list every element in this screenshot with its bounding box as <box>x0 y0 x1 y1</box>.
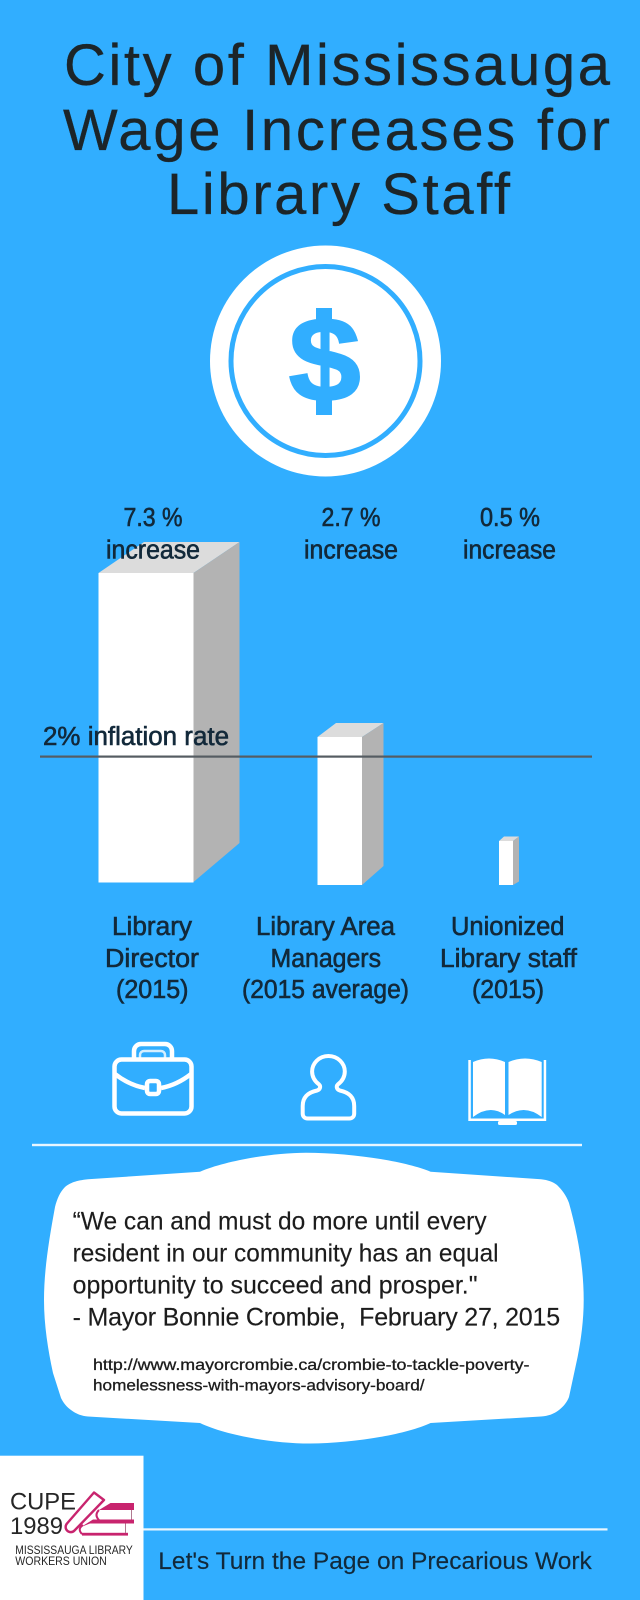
logo wordmark: 1989 <box>10 1513 63 1540</box>
bar: Unionized Library staff <box>499 836 519 885</box>
label: Library Director (2015) <box>105 913 200 1004</box>
label: Unionized Library staff (2015): Unionized <box>451 913 564 941</box>
label: Library Director (2015): Director <box>105 945 200 973</box>
label: Library Area Managers (2015 average): Managers <box>270 945 381 973</box>
source link <box>93 1357 530 1395</box>
label: 2.7 % increase: 2.7 % <box>322 504 380 532</box>
divider <box>32 1144 582 1146</box>
logo wordmark: CUPE <box>10 1488 76 1516</box>
logo: books icon <box>66 1492 134 1536</box>
label: 2.7 % increase: increase <box>304 536 398 564</box>
quote text: - Mayor Bonnie Crombie, February 27, 2015 <box>73 1303 560 1331</box>
label: inflation rate: 2% inflation rate <box>43 723 229 751</box>
label: Library Director (2015): Library <box>112 913 192 941</box>
title: Wage Increases for <box>63 98 610 163</box>
source link: http://www.mayorcrombie.ca/crombie-to-tackle-poverty- <box>93 1357 530 1374</box>
bar: Library Director <box>98 542 240 882</box>
logo wordmark <box>10 1488 133 1568</box>
source link: homelessness-with-mayors-advisory-board/ <box>93 1378 425 1395</box>
logo wordmark: WORKERS UNION <box>15 1556 107 1568</box>
icon: dollar coin: $ <box>289 293 361 427</box>
icon: person <box>303 1056 354 1118</box>
label: Library Director (2015): (2015) <box>116 976 188 1004</box>
inflation line <box>40 756 592 758</box>
label: Unionized Library staff (2015) <box>440 913 578 1004</box>
bar: Library Area Managers <box>318 723 384 885</box>
label: Unionized Library staff (2015): Library staff <box>440 945 578 973</box>
label: 7.3 % increase: increase <box>106 536 200 564</box>
quote text: “We can and must do more until every <box>73 1207 487 1235</box>
title <box>63 33 611 227</box>
label: 7.3 % increase: 7.3 % <box>124 504 182 532</box>
quote panel <box>44 1153 584 1444</box>
label: 0.5 % increase <box>463 504 556 564</box>
logo: CUPE 1989 <box>0 1456 144 1600</box>
label: Unionized Library staff (2015): (2015) <box>472 976 544 1004</box>
label: 0.5 % increase: increase <box>463 536 556 564</box>
icon: briefcase <box>114 1044 192 1114</box>
quote text <box>73 1207 560 1331</box>
footer line <box>144 1528 608 1530</box>
label: Library Area Managers (2015 average): Library Area <box>256 913 396 941</box>
label: 7.3 % increase <box>106 504 200 564</box>
icon: open book <box>468 1058 546 1125</box>
quote text: opportunity to succeed and prosper." <box>73 1271 478 1299</box>
label: Library Area Managers (2015 average): (2015 average) <box>242 976 409 1004</box>
title: City of Mississauga <box>64 33 611 98</box>
label: Library Area Managers (2015 average) <box>242 913 409 1004</box>
label: 2.7 % increase <box>304 504 398 564</box>
label: 0.5 % increase: 0.5 % <box>480 504 540 532</box>
footer slogan: Let's Turn the Page on Precarious Work <box>158 1548 593 1575</box>
icon: dollar coin <box>210 246 441 476</box>
logo wordmark: MISSISSAUGA LIBRARY <box>15 1545 133 1557</box>
quote text: resident in our community has an equal <box>73 1239 499 1267</box>
title: Library Staff <box>167 162 511 227</box>
